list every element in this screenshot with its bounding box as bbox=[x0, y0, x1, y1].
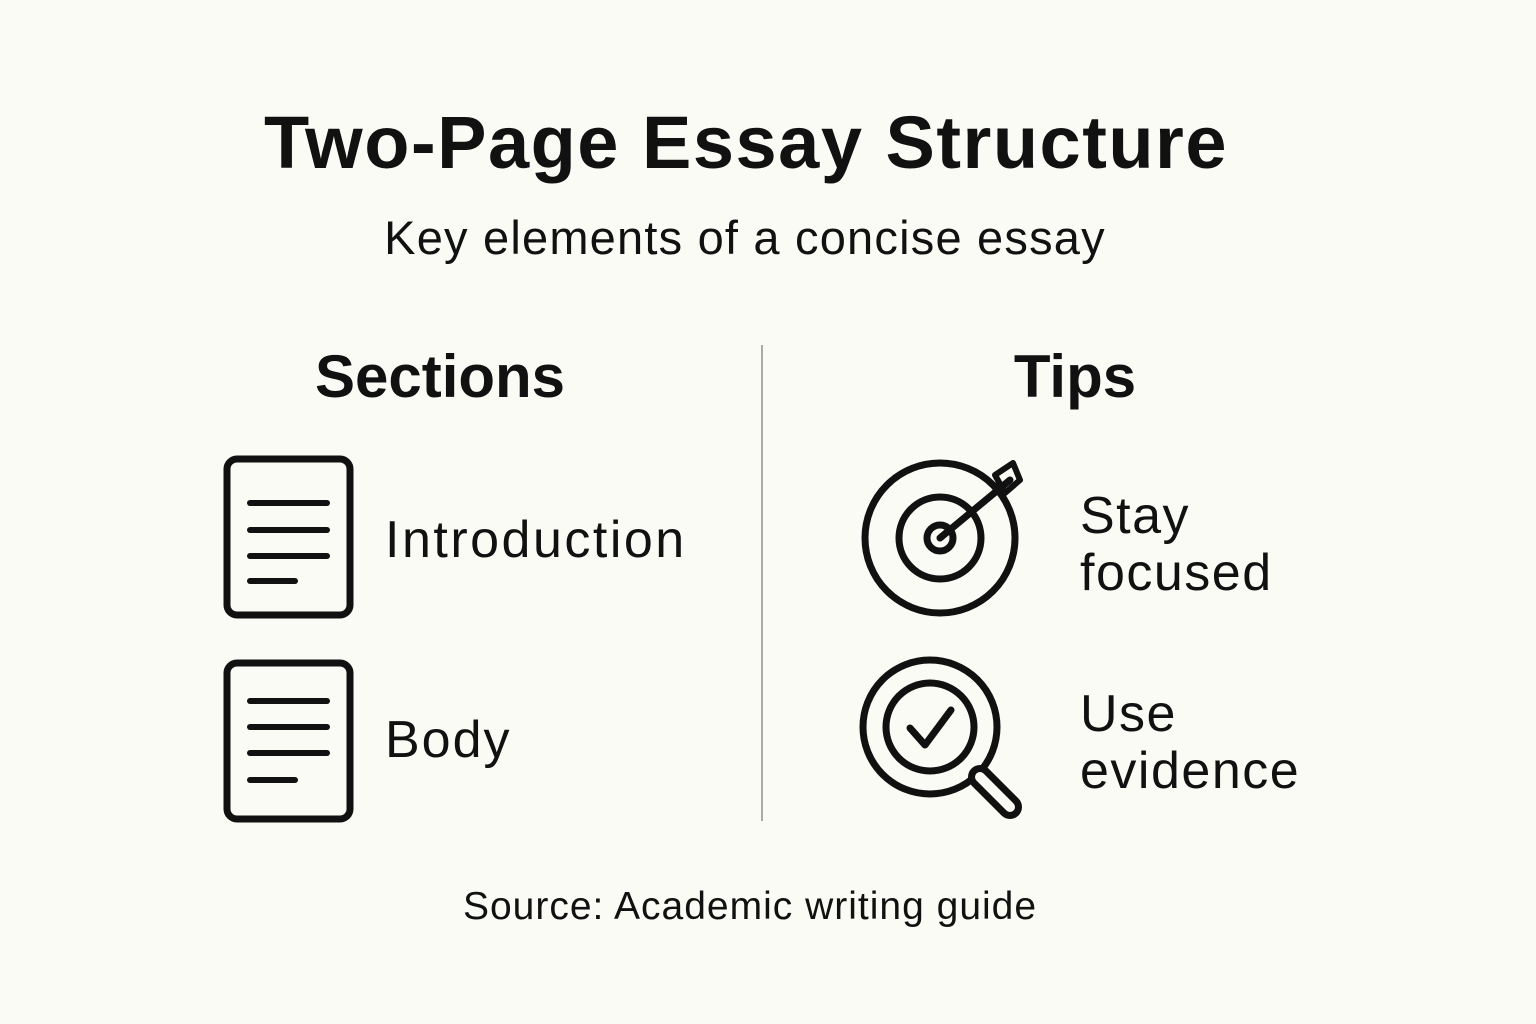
divider bbox=[761, 345, 763, 821]
icon: target bbox=[862, 460, 1024, 616]
heading: Sections: Sections bbox=[315, 343, 565, 410]
label: Use evidence bbox=[1080, 685, 1300, 800]
title: Two-Page Essay Structure bbox=[264, 101, 1228, 184]
label: Use evidence: Use bbox=[1080, 685, 1177, 743]
icon: document introduction bbox=[224, 456, 354, 618]
source note: Source: Academic writing guide bbox=[463, 885, 1037, 928]
icon: document body bbox=[224, 660, 354, 822]
subtitle: Key elements of a concise essay bbox=[384, 211, 1106, 264]
label: Body: Body bbox=[385, 711, 512, 769]
heading: Tips: Tips bbox=[1014, 343, 1136, 410]
label: Introduction: Introduction bbox=[385, 511, 687, 569]
label: Use evidence: evidence bbox=[1080, 742, 1300, 800]
label: Stay focused bbox=[1080, 487, 1273, 602]
icon: magnifier with check bbox=[860, 656, 1022, 819]
label: Stay focused: Stay bbox=[1080, 487, 1190, 545]
label: Stay focused: focused bbox=[1080, 544, 1273, 602]
